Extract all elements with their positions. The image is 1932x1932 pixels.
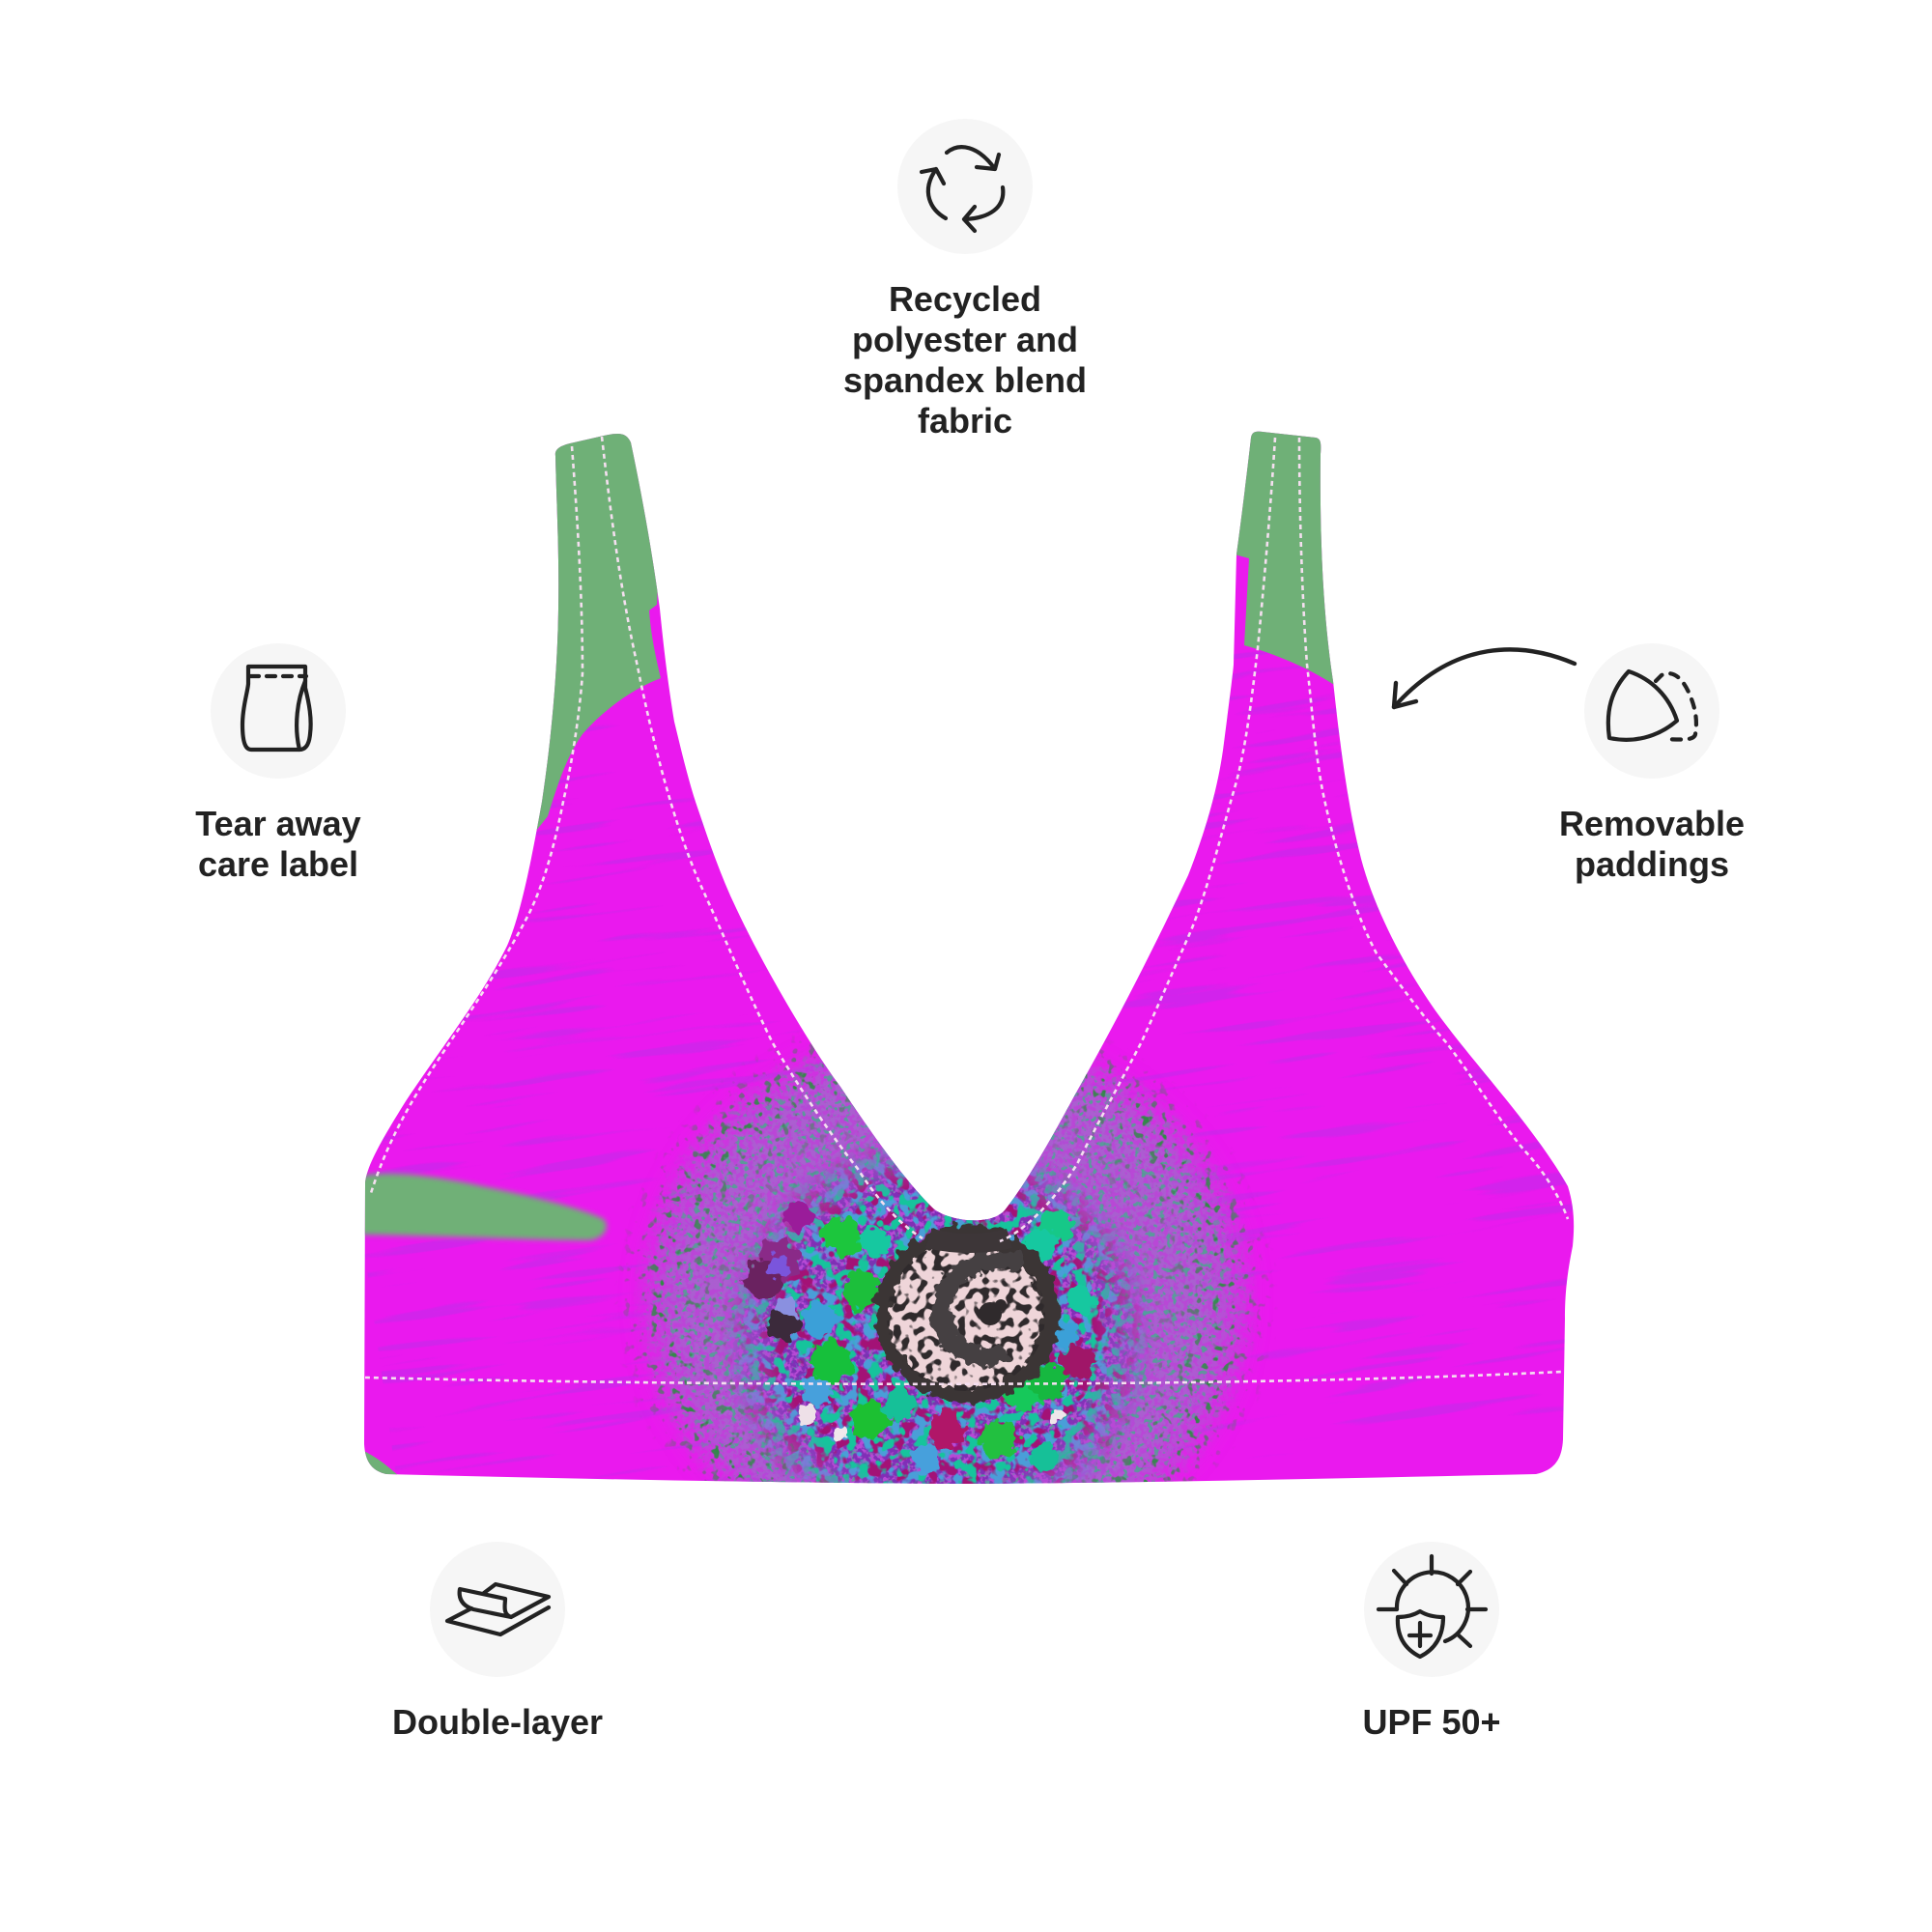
label: double layer: Double-layer — [392, 1702, 603, 1742]
label: removable paddings: Removable — [1559, 804, 1745, 843]
fabric base — [357, 425, 1584, 1497]
label: tear away: Tear away — [195, 804, 361, 843]
label: removable paddings: paddings — [1575, 844, 1729, 884]
icon: recycle badge — [897, 119, 1033, 254]
green strap right — [1236, 431, 1333, 684]
label: tear away: care label — [198, 844, 358, 884]
label: recycled fabric: spandex blend — [843, 360, 1087, 400]
flower sequin blobs — [744, 1203, 1096, 1474]
icon: UPF sun shield badge — [1364, 1542, 1499, 1677]
green strap left — [537, 434, 661, 831]
label: recycled fabric: fabric — [918, 401, 1012, 440]
flower inner petals — [723, 1144, 1150, 1484]
icon: removable paddings badge — [1584, 643, 1719, 779]
fabric brush streaks — [365, 651, 1573, 1482]
arrow — [1394, 649, 1575, 707]
label: recycled fabric: polyester and — [852, 320, 1078, 359]
stitching — [365, 437, 1568, 1384]
icon: tear away label badge — [211, 643, 346, 779]
spiral centre — [875, 1225, 1061, 1403]
flower halo — [615, 1033, 1277, 1484]
label: recycled fabric: Recycled — [889, 279, 1041, 319]
green streak left — [357, 1174, 607, 1240]
icon: double layer badge — [430, 1542, 565, 1677]
green corner bottom left — [365, 1451, 398, 1474]
neck bottom dark edge — [925, 1229, 1012, 1253]
label: UPF: UPF 50+ — [1362, 1702, 1501, 1742]
panel: bikini top product photo — [364, 431, 1575, 1484]
